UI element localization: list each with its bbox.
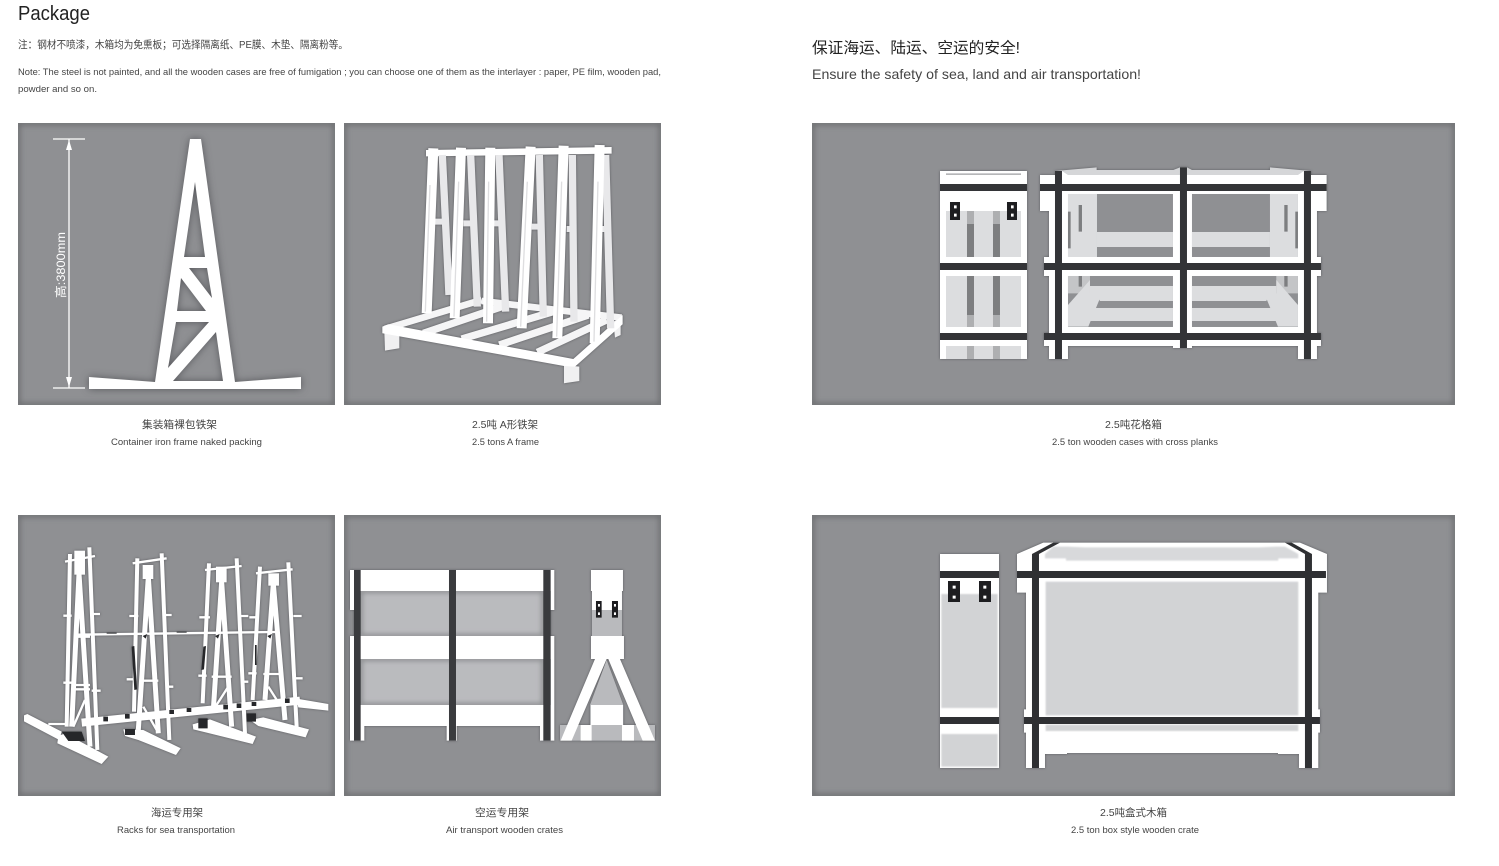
caption: 2.5 tons A frame — [472, 418, 539, 448]
panel: wooden cases with cross planks — [812, 123, 1455, 405]
icon: cross plank crate side view — [940, 171, 1027, 359]
caption: container iron frame — [111, 418, 262, 448]
caption: container iron frame: 集装箱裸包铁架 — [142, 418, 218, 431]
caption: box style wooden crate: 2.5吨盒式木箱 — [1100, 806, 1167, 819]
caption: air transport wooden crates: Air transport wooden crates — [446, 825, 563, 836]
caption: wooden cases with cross planks: 2.5 ton wooden cases with cross planks — [1052, 437, 1218, 448]
note in English: Note: The steel is not painted, and all the wooden cases are free of fumigation ; you can choose one of them as the interlayer : paper, PE film, wooden pad, — [18, 67, 661, 78]
title: Package: Package — [18, 3, 90, 25]
heading: transport safety English: Ensure the safety of sea, land and air transportation! — [812, 66, 1141, 82]
icon: A-frame elevation — [89, 139, 301, 389]
caption: box style wooden crate: 2.5 ton box style wooden crate — [1071, 825, 1199, 836]
icon: box crate side view — [940, 554, 999, 768]
icon: box crate front view — [1017, 543, 1327, 768]
note in Chinese: 注：钢材不喷漆，木箱均为免熏板；可选择隔离纸、PE膜、木垫、隔离粉等。 — [18, 38, 348, 51]
caption: racks for sea transportation: 海运专用架 — [151, 806, 203, 819]
icon: air crate side view — [560, 570, 655, 741]
caption: 2.5 tons A frame: 2.5 tons A frame — [472, 437, 539, 448]
caption: 2.5 tons A frame: 2.5吨 A形铁架 — [472, 418, 538, 431]
panel: air transport wooden crates — [344, 515, 661, 796]
caption: container iron frame: Container iron frame naked packing — [111, 437, 262, 448]
dimension label: 高:3800mm — [53, 232, 68, 298]
dimension arrow — [53, 139, 85, 388]
panel: racks for sea transportation — [18, 515, 335, 796]
panel: container iron frame — [18, 123, 335, 405]
caption: wooden cases with cross planks: 2.5吨花格箱 — [1105, 418, 1162, 431]
note in English — [18, 67, 661, 95]
caption: air transport wooden crates — [446, 806, 563, 836]
caption: wooden cases with cross planks — [1052, 418, 1218, 448]
note in English: powder and so on. — [18, 84, 97, 95]
caption: racks for sea transportation — [117, 806, 235, 836]
icon: A-frame rack perspective — [382, 145, 623, 383]
heading: transport safety Chinese: 保证海运、陆运、空运的安全! — [812, 39, 1020, 57]
caption: air transport wooden crates: 空运专用架 — [475, 806, 530, 819]
icon: four linked sea racks — [24, 547, 328, 764]
caption: box style wooden crate — [1071, 806, 1199, 836]
icon: air crate front view — [350, 570, 554, 741]
caption: racks for sea transportation: Racks for sea transportation — [117, 825, 235, 836]
icon: cross plank crate front view — [1040, 167, 1327, 359]
panel: 2.5 tons A frame — [344, 123, 661, 405]
panel: box style wooden crate — [812, 515, 1455, 796]
